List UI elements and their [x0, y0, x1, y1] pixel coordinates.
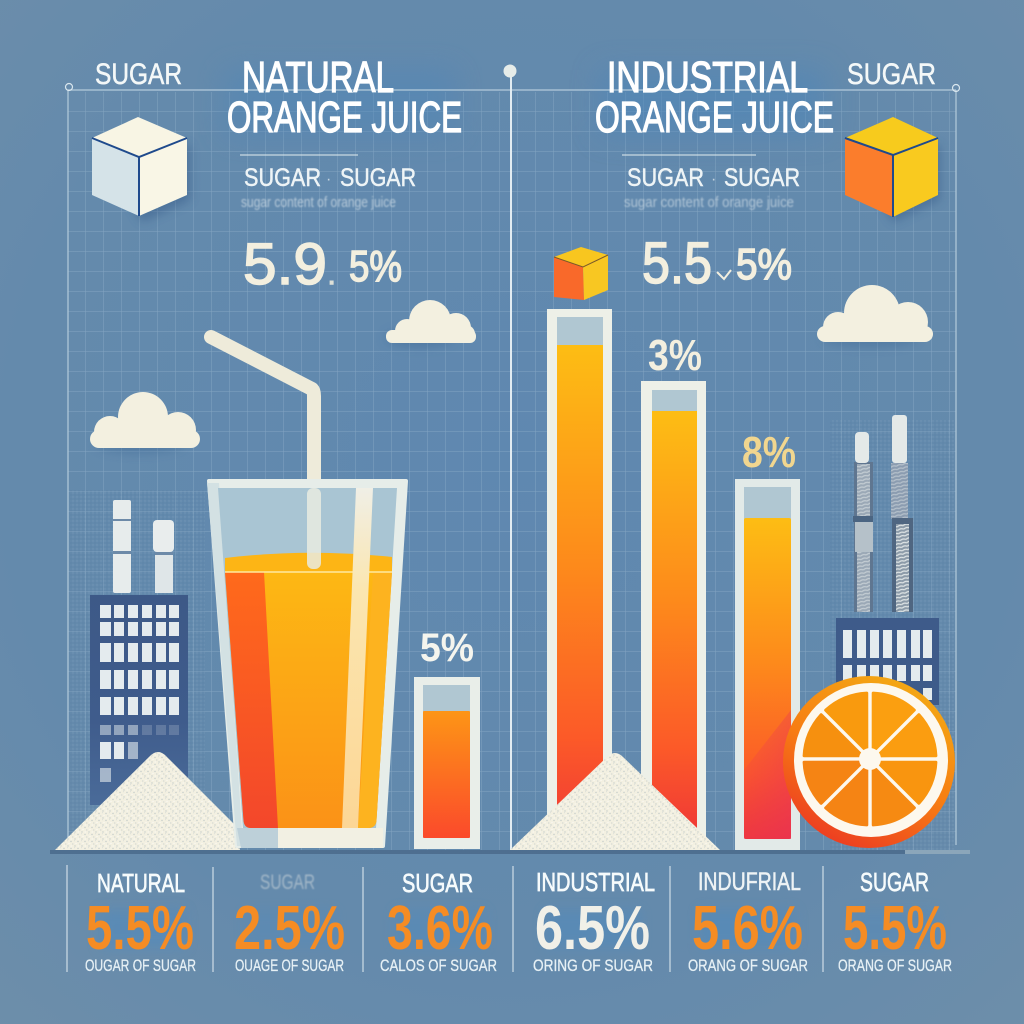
bar: industrial two [641, 381, 706, 850]
big value: . [328, 260, 335, 290]
label: sugar: SUGAR [95, 58, 182, 91]
bar: industrial three [735, 479, 800, 850]
stat: 2.5 percent: OUAGE OF SUGAR [235, 956, 344, 975]
big value [642, 231, 792, 296]
stat: 2.5 percent [234, 871, 345, 975]
stat: indufrial 5.6 percent: 5.6% [692, 894, 803, 963]
label: 5 percent: 5% [420, 626, 474, 670]
icon: white sugar cube [92, 117, 190, 222]
stat: natural 5.5 percent: OUGAR OF SUGAR [85, 956, 196, 975]
icon: orange sugar cube [845, 117, 940, 222]
big value: 5.5 [642, 231, 712, 296]
big value [243, 232, 402, 297]
stat: 2.5 percent: SUGAR [260, 871, 315, 894]
heading: natural orange juice [227, 53, 462, 142]
sub heading: sugar sugar: · [326, 171, 331, 188]
sub heading: sugar sugar: SUGAR [627, 164, 704, 192]
stat: 2.5 percent: 2.5% [234, 894, 345, 963]
icon: small orange cube [554, 247, 608, 300]
heading: natural orange juice: NATURAL [242, 53, 394, 102]
label: sugar: SUGAR [847, 58, 936, 91]
icon: cloud left lower [90, 392, 200, 453]
panel: industrial statistics [513, 866, 952, 975]
grid lines [68, 92, 956, 850]
label: 3 percent: 3% [648, 331, 702, 380]
stat: sugar 5.5 percent: 5.5% [843, 894, 947, 963]
bar: natural 5 percent [414, 677, 480, 849]
icon: factory right [836, 415, 939, 705]
icon: cloud right [817, 285, 933, 347]
illustration: juice glass [207, 481, 406, 848]
panel: natural orange juice [55, 53, 480, 850]
sub heading: sugar sugar: SUGAR [244, 164, 321, 192]
label: 8 percent: 8% [742, 428, 796, 477]
stat: natural 5.5 percent: NATURAL [97, 868, 185, 898]
sub heading: sugar sugar: sugar content of orange juice [241, 194, 396, 211]
bar: industrial one [547, 309, 612, 850]
axis lines [66, 64, 960, 850]
big value: 5% [349, 242, 402, 291]
stat: industrial 6.5 percent: ORING OF SUGAR [533, 956, 653, 975]
ground line [50, 850, 970, 854]
heading: industrial orange juice: INDUSTRIAL [607, 53, 808, 102]
stat: indufrial 5.6 percent: INDUFRIAL [698, 868, 801, 896]
stat: sugar 3.6 percent: CALOS OF SUGAR [380, 956, 497, 975]
stat: indufrial 5.6 percent [688, 868, 808, 975]
sub heading: sugar sugar: sugar content of orange juice [624, 194, 794, 211]
panel: industrial orange juice [510, 53, 955, 850]
stat: sugar 3.6 percent [380, 868, 497, 975]
stat: industrial 6.5 percent: INDUSTRIAL [536, 867, 655, 897]
sub heading: sugar sugar: SUGAR [724, 164, 800, 192]
stat: industrial 6.5 percent: 6.5% [535, 894, 650, 963]
sub heading: sugar sugar: · [711, 171, 716, 188]
icon: orange slice [783, 676, 955, 848]
panel: natural statistics [67, 865, 497, 975]
stat: sugar 3.6 percent: SUGAR [402, 868, 473, 898]
illustration: straw top [211, 337, 314, 480]
big value: 5.9 [243, 232, 327, 297]
stat: natural 5.5 percent [85, 868, 196, 975]
stat: sugar 3.6 percent: 3.6% [387, 894, 493, 963]
heading: industrial orange juice: ORANGE JUICE [595, 93, 834, 142]
stat: sugar 5.5 percent: ORANG OF SUGAR [838, 956, 952, 975]
stat: indufrial 5.6 percent: ORANG OF SUGAR [688, 956, 808, 975]
sub heading: sugar sugar: SUGAR [340, 164, 416, 192]
icon: sugar pile left [55, 752, 240, 850]
big value: 5% [736, 240, 792, 289]
icon: sugar pile right [510, 753, 720, 850]
sub heading: sugar sugar [622, 155, 800, 211]
heading: natural orange juice: ORANGE JUICE [227, 93, 462, 142]
stat: sugar 5.5 percent [838, 867, 952, 975]
icon: cloud left upper [386, 300, 476, 347]
heading: industrial orange juice [595, 53, 834, 142]
stat: natural 5.5 percent: 5.5% [86, 894, 194, 963]
stat: industrial 6.5 percent [533, 867, 655, 975]
icon: factory left [90, 500, 188, 805]
stat: sugar 5.5 percent: SUGAR [860, 867, 929, 897]
sub heading: sugar sugar [240, 155, 416, 211]
